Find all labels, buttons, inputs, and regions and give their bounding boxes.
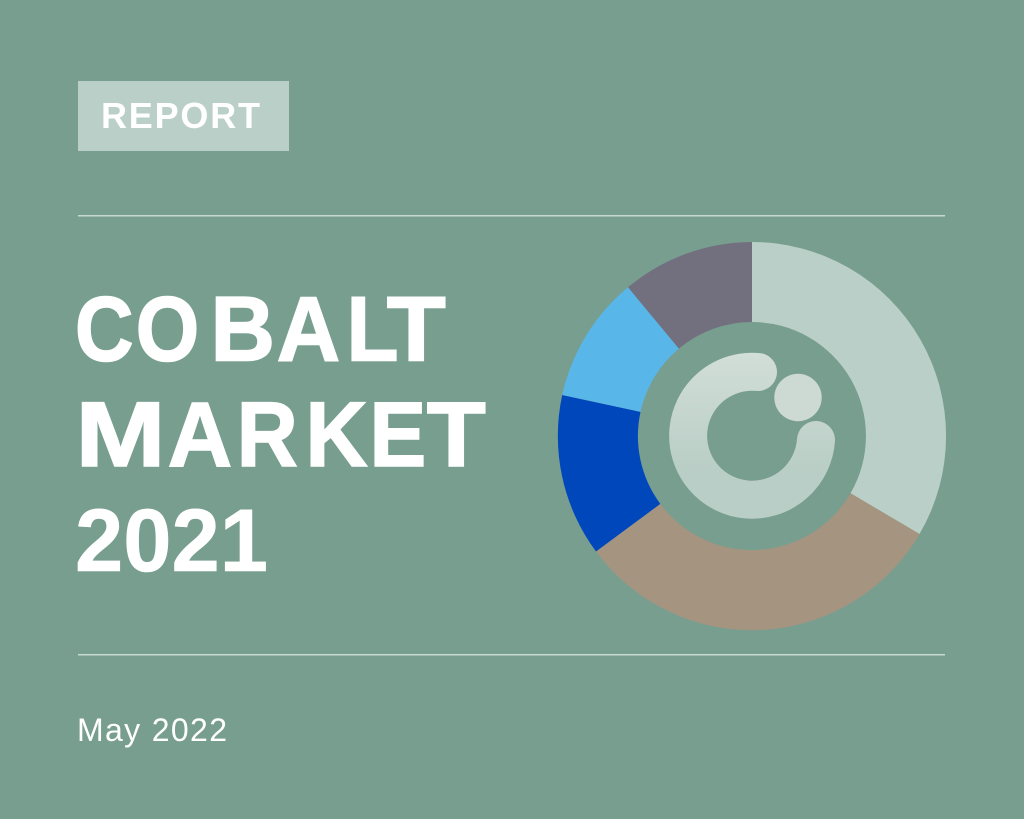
title: M	[76, 384, 166, 486]
logo: cobalt ring and dot	[688, 372, 822, 500]
date: May 2022	[77, 712, 227, 748]
segment: pale green	[752, 242, 946, 534]
badge: report	[78, 81, 289, 151]
badge: report: REPORT	[101, 95, 260, 136]
segment: taupe	[596, 493, 920, 630]
title: K	[306, 384, 368, 486]
segment: royal blue	[558, 395, 660, 552]
title: E	[370, 384, 426, 486]
donut chart	[558, 242, 946, 630]
title: 2021	[75, 490, 268, 590]
segment: slate grey	[628, 242, 752, 349]
title: O	[136, 279, 199, 381]
title: C	[75, 279, 134, 381]
title: T	[427, 384, 486, 486]
title: R	[237, 384, 298, 486]
title: B	[210, 279, 275, 381]
title: T	[387, 279, 446, 381]
title: A	[168, 384, 232, 486]
title	[75, 279, 486, 590]
title: L	[346, 279, 398, 381]
segment: light blue	[562, 287, 679, 412]
title: A	[277, 279, 340, 381]
